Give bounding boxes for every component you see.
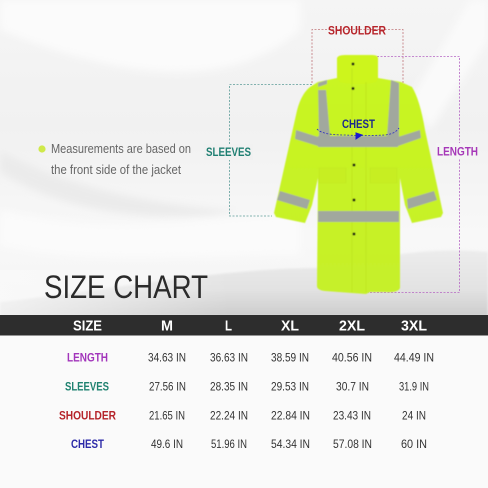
row: chest: 51.96 IN bbox=[211, 439, 247, 451]
row: chest: 60 IN bbox=[401, 439, 427, 451]
pockets bbox=[319, 168, 397, 183]
label: sleeves: SLEEVES bbox=[206, 147, 251, 159]
row: shoulder bbox=[59, 410, 426, 422]
table header: L bbox=[225, 318, 232, 334]
row: sleeves: 28.35 IN bbox=[210, 382, 248, 394]
row: shoulder: 22.24 IN bbox=[210, 410, 248, 422]
table header: M bbox=[161, 318, 173, 334]
label: length: LENGTH bbox=[437, 146, 478, 158]
bullet note: Measurements are based on bbox=[51, 142, 191, 156]
table header: XL bbox=[281, 318, 299, 334]
row: length: 36.63 IN bbox=[210, 352, 248, 364]
label: shoulder: SHOULDER bbox=[328, 26, 387, 38]
row: shoulder: 21.65 IN bbox=[149, 410, 185, 422]
row: sleeves: 27.56 IN bbox=[149, 382, 186, 394]
row: length: LENGTH bbox=[67, 352, 108, 364]
row: shoulder: SHOULDER bbox=[59, 410, 117, 422]
folds and placket bbox=[352, 68, 366, 292]
jacket bbox=[274, 55, 443, 294]
row: chest: CHEST bbox=[71, 439, 104, 451]
table header bbox=[0, 315, 488, 336]
row: length bbox=[67, 352, 434, 364]
bullet note: the front side of the jacket bbox=[51, 163, 181, 177]
row: chest bbox=[71, 439, 427, 451]
row: length: 34.63 IN bbox=[148, 352, 186, 364]
row: length: 40.56 IN bbox=[332, 352, 372, 364]
row: shoulder: 22.84 IN bbox=[271, 410, 310, 422]
table header: 2XL bbox=[339, 318, 365, 334]
dashed measure: sleeves bbox=[230, 84, 312, 216]
sleeves and body bbox=[274, 78, 443, 294]
row: chest: 57.08 IN bbox=[333, 439, 372, 451]
chest measure arrow bbox=[317, 128, 399, 139]
bullet note bbox=[38, 142, 191, 177]
row: length: 44.49 IN bbox=[394, 352, 434, 364]
reflective stripes bbox=[277, 80, 437, 222]
row: sleeves: 29.53 IN bbox=[271, 382, 309, 394]
row: sleeves: SLEEVES bbox=[65, 382, 109, 394]
row: sleeves: 30.7 IN bbox=[336, 382, 369, 394]
collar bbox=[337, 55, 378, 84]
dashed measure: length bbox=[368, 56, 460, 292]
table header: SIZE bbox=[73, 318, 102, 334]
row: sleeves bbox=[65, 382, 429, 394]
buttons bbox=[352, 62, 356, 236]
table header: 3XL bbox=[401, 318, 427, 334]
row: length: 38.59 IN bbox=[271, 352, 309, 364]
row: chest: 54.34 IN bbox=[271, 439, 310, 451]
label: length bbox=[436, 143, 478, 159]
row: shoulder: 23.43 IN bbox=[333, 410, 371, 422]
title: SIZE CHART bbox=[44, 269, 208, 305]
row: shoulder: 24 IN bbox=[402, 410, 426, 422]
dashed measure: shoulder bbox=[312, 30, 403, 85]
row: sleeves: 31.9 IN bbox=[399, 382, 429, 394]
row: chest: 49.6 IN bbox=[151, 439, 183, 451]
label: sleeves bbox=[204, 144, 253, 160]
label: chest: CHEST bbox=[342, 119, 375, 131]
